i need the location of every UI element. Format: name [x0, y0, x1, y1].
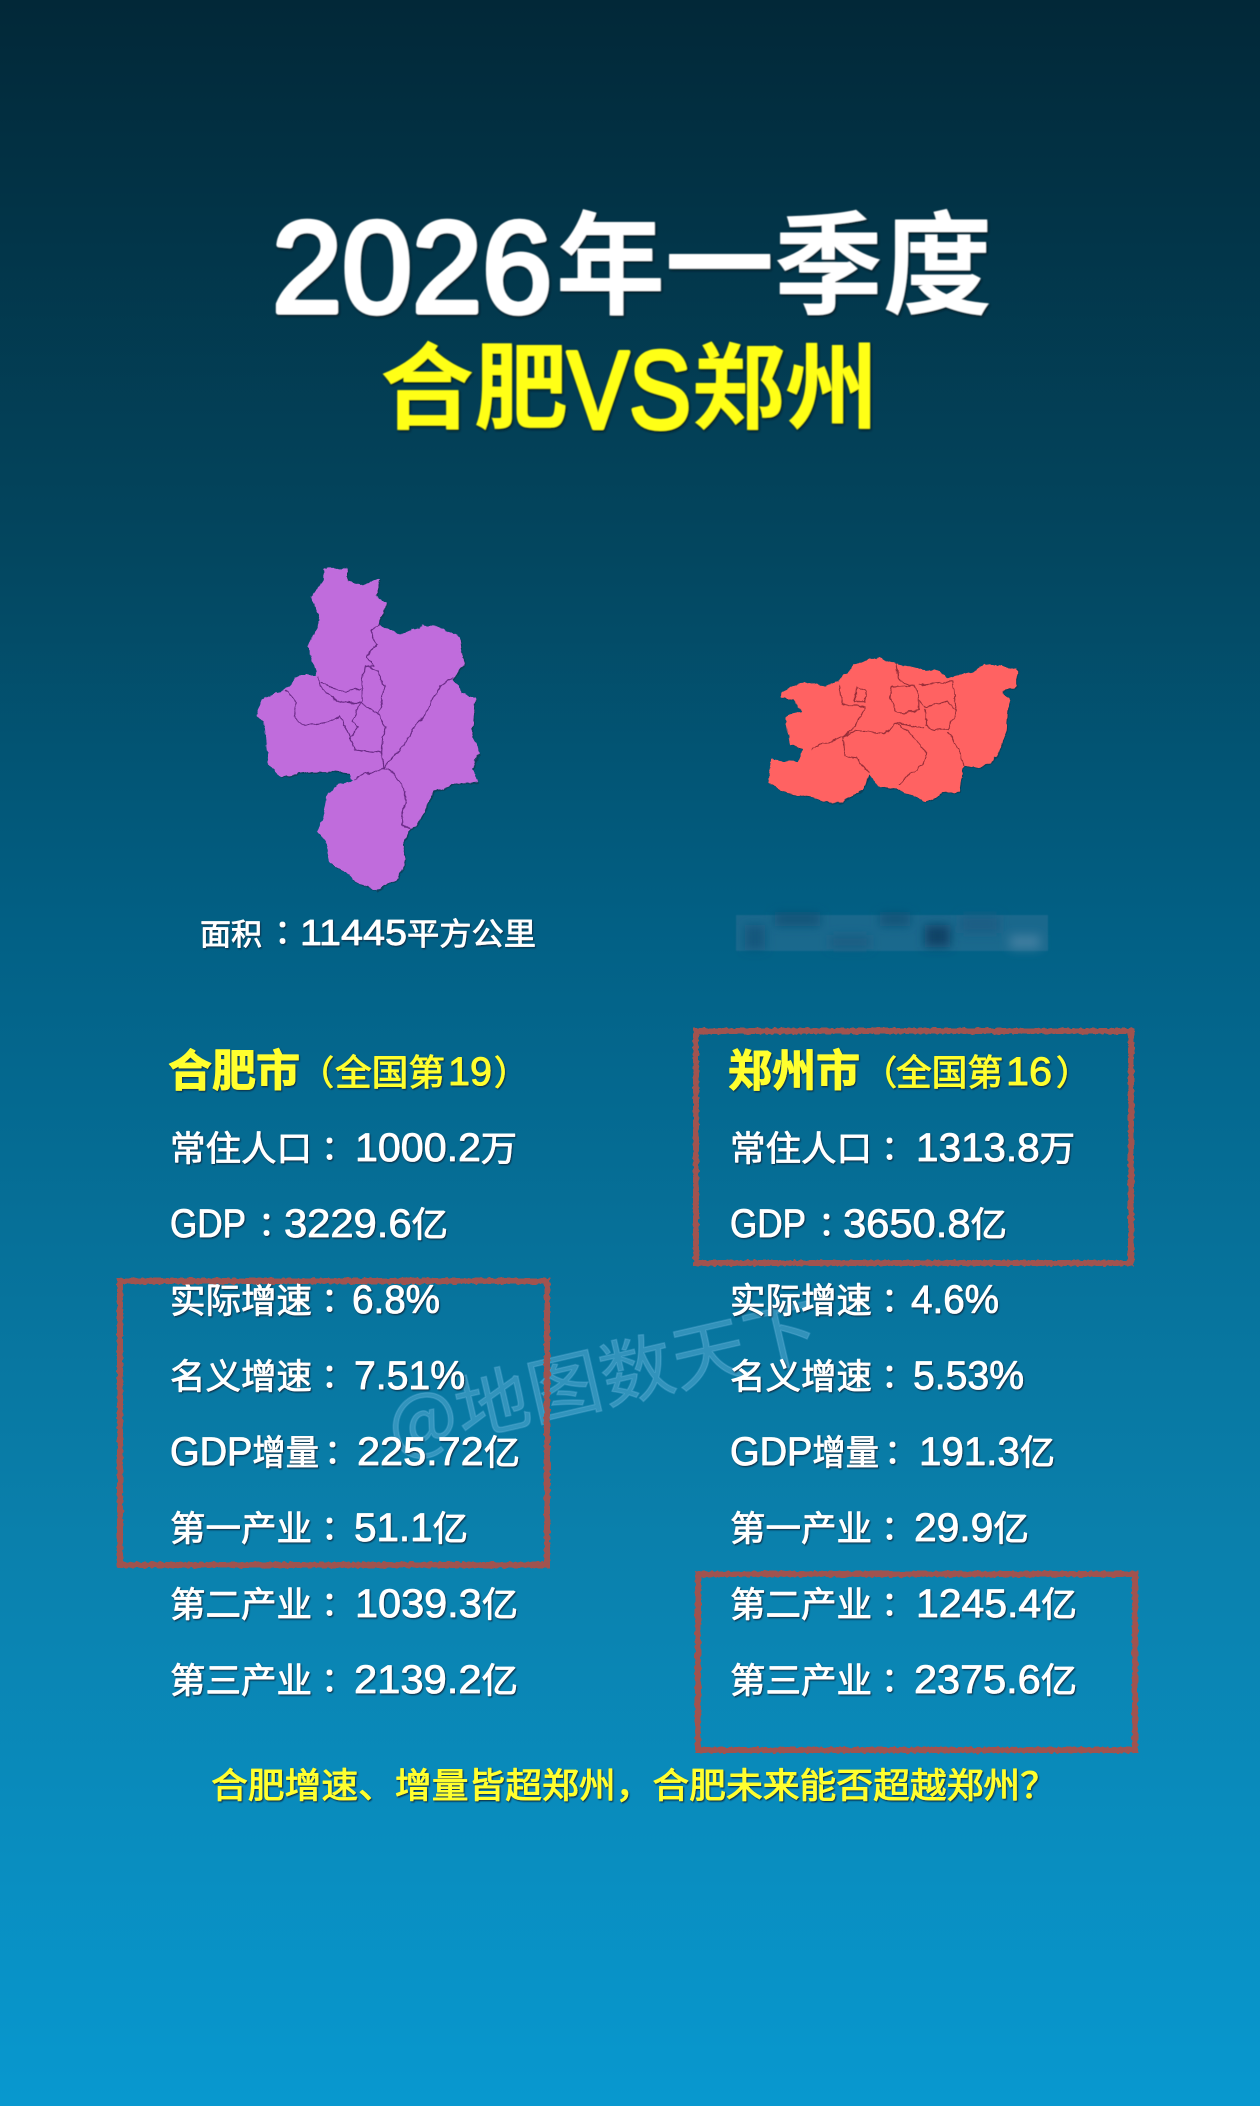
row: nominal growth: 5.53%: [913, 1354, 1024, 1398]
row: tertiary industry: 第三产业: [730, 1653, 872, 1704]
area label: Hefei: ：: [266, 907, 299, 955]
row: nominal growth: 7.51%: [354, 1354, 465, 1398]
row: GDP increase: 225.72亿: [357, 1425, 520, 1476]
subtitle: 合肥VS郑州: [380, 313, 878, 452]
row: nominal growth: 名义增速: [730, 1349, 872, 1400]
row: population: 1000.2万: [355, 1121, 517, 1172]
row: real growth: ：: [873, 1275, 906, 1323]
highlight box: Zhengzhou secondary and tertiary industry: [698, 1574, 1135, 1750]
row: tertiary industry: 2375.6亿: [914, 1653, 1077, 1704]
row: population: ：: [873, 1123, 906, 1171]
row: GDP increase: ：: [316, 1427, 349, 1475]
row: secondary industry: 第二产业: [170, 1577, 312, 1628]
row: GDP increase: [730, 1425, 1055, 1476]
watermark: @地图数天下: [375, 1272, 827, 1473]
row: secondary industry: [170, 1577, 518, 1628]
subtitle: 合肥VS郑州: 郑州: [692, 313, 878, 449]
map: Zhengzhou: [768, 657, 1018, 804]
row: GDP: 3229.6亿: [284, 1197, 448, 1248]
heading: Hefei: 全国第: [335, 1044, 445, 1096]
row: primary industry: 29.9亿: [914, 1501, 1029, 1552]
area label: Hefei: 平方公里: [407, 909, 536, 954]
conclusion caption: 合肥增速、增量皆超郑州，合肥未来能否超越郑州？: [211, 1758, 1057, 1809]
row: nominal growth: [170, 1349, 465, 1400]
row: primary industry: ：: [873, 1503, 906, 1551]
row: primary industry: [170, 1501, 468, 1552]
title: 2026年一季度: [272, 176, 992, 340]
row: tertiary industry: 第三产业: [170, 1653, 312, 1704]
highlight box: Hefei growth rows: [120, 1281, 547, 1565]
subtitle: 合肥VS郑州: 合肥: [380, 313, 568, 449]
row: nominal growth: 名义增速: [170, 1349, 312, 1400]
row: GDP: [730, 1197, 1007, 1248]
heading: Zhengzhou: 郑州市: [728, 1035, 860, 1099]
panel: Hefei statistics: [168, 1035, 528, 1704]
row: GDP: ：: [250, 1199, 283, 1247]
row: population: [170, 1121, 517, 1172]
row: secondary industry: ：: [313, 1579, 346, 1627]
row: real growth: [730, 1273, 999, 1324]
map: Hefei: [256, 568, 480, 893]
row: GDP increase: GDP增量: [170, 1425, 319, 1476]
row: population: 常住人口: [730, 1121, 872, 1172]
row: nominal growth: ：: [873, 1351, 906, 1399]
row: primary industry: ：: [313, 1503, 346, 1551]
title: 2026年一季度: 年一季度: [556, 176, 992, 338]
heading: Zhengzhou: [728, 1035, 1090, 1099]
area label: Hefei: 面积: [200, 910, 262, 954]
row: real growth: [170, 1273, 440, 1324]
row: tertiary industry: [730, 1653, 1077, 1704]
heading: Hefei: ）: [494, 1046, 528, 1095]
heading: Hefei: 19: [448, 1050, 492, 1094]
heading: Hefei: [168, 1035, 528, 1099]
row: tertiary industry: ：: [313, 1655, 346, 1703]
row: primary industry: 第一产业: [170, 1501, 312, 1552]
row: GDP: 3650.8亿: [843, 1197, 1007, 1248]
row: nominal growth: ：: [313, 1351, 346, 1399]
row: nominal growth: [730, 1349, 1024, 1400]
row: real growth: ：: [313, 1275, 346, 1323]
row: primary industry: 51.1亿: [354, 1501, 468, 1552]
row: secondary industry: ：: [873, 1579, 906, 1627]
heading: Zhengzhou: ）: [1056, 1046, 1090, 1095]
row: GDP: GDP: [730, 1202, 806, 1246]
row: secondary industry: [730, 1577, 1077, 1628]
row: GDP increase: ：: [876, 1427, 909, 1475]
row: tertiary industry: [170, 1653, 518, 1704]
row: secondary industry: 1245.4亿: [916, 1577, 1077, 1628]
heading: Hefei: 合肥市: [168, 1035, 300, 1099]
row: GDP: ：: [810, 1199, 843, 1247]
row: GDP: [170, 1197, 448, 1248]
row: real growth: 4.6%: [911, 1278, 999, 1322]
panel: Zhengzhou statistics: [728, 1035, 1090, 1704]
blurred area label: Zhengzhou: [736, 912, 1048, 951]
highlight box: Zhengzhou rank, population and GDP: [696, 1031, 1131, 1263]
row: real growth: 6.8%: [352, 1278, 440, 1322]
row: GDP increase: GDP增量: [730, 1425, 879, 1476]
row: real growth: 实际增速: [170, 1273, 312, 1324]
row: real growth: 实际增速: [730, 1273, 872, 1324]
row: population: 1313.8万: [916, 1121, 1075, 1172]
heading: Hefei: （: [300, 1046, 334, 1095]
row: primary industry: [730, 1501, 1029, 1552]
row: GDP increase: [170, 1425, 520, 1476]
row: primary industry: 第一产业: [730, 1501, 872, 1552]
row: population: [730, 1121, 1075, 1172]
area label: Hefei: [200, 907, 536, 955]
row: GDP increase: 191.3亿: [919, 1425, 1055, 1476]
subtitle: 合肥VS郑州: VS: [567, 329, 691, 452]
area label: Hefei: 11445: [300, 912, 407, 953]
row: secondary industry: 1039.3亿: [355, 1577, 518, 1628]
row: population: ：: [313, 1123, 346, 1171]
row: tertiary industry: ：: [873, 1655, 906, 1703]
heading: Zhengzhou: 16: [1006, 1050, 1052, 1094]
row: tertiary industry: 2139.2亿: [354, 1653, 518, 1704]
title: 2026年一季度: 2026: [272, 194, 552, 340]
row: population: 常住人口: [170, 1121, 312, 1172]
heading: Zhengzhou: （: [863, 1046, 897, 1095]
heading: Zhengzhou: 全国第: [896, 1044, 1003, 1096]
row: GDP: GDP: [170, 1202, 246, 1246]
row: secondary industry: 第二产业: [730, 1577, 872, 1628]
